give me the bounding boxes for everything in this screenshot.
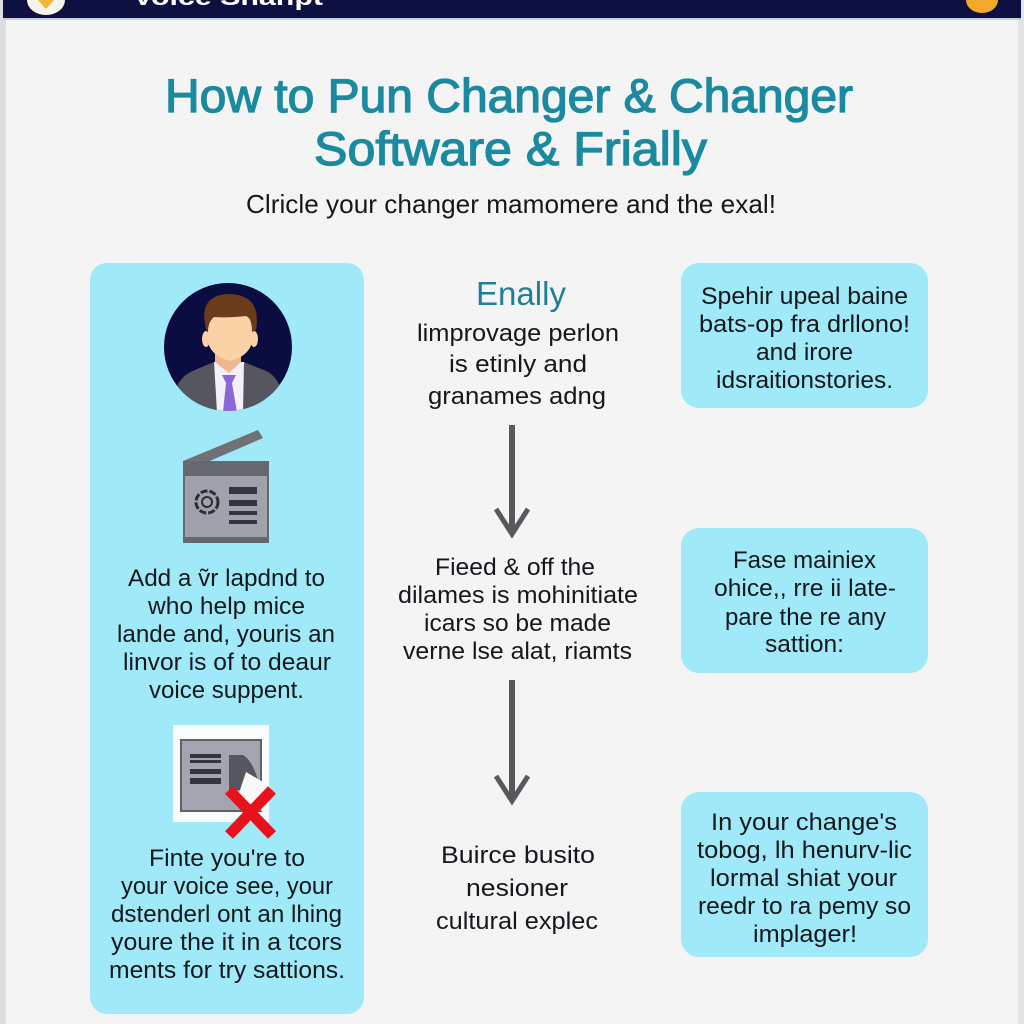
title	[165, 69, 853, 175]
panel: right card 1: and irore	[756, 339, 853, 366]
panel: right card 1	[681, 263, 928, 408]
panel: right card 2: Fase mainiex	[733, 547, 876, 574]
panel: right card 3	[681, 792, 928, 957]
panel: right card 3: tobog, lh henurv-lic	[697, 837, 912, 864]
icon: logo badge	[27, 0, 65, 15]
panel: right card 2: ohice,, rre ii late-	[714, 575, 896, 602]
text block: middle step 1	[417, 320, 619, 410]
text block: middle step 3: Buirce busito	[441, 842, 595, 869]
panel: right card 1: bats-op fra drllono!	[699, 311, 910, 338]
text block: middle step 1: granames adng	[428, 383, 606, 410]
text block: left upper	[117, 565, 335, 704]
panel: right card 2: sattion:	[765, 631, 844, 658]
text block: left upper: who help mice	[147, 593, 305, 620]
panel: right card 1: idsraitionstories.	[716, 367, 893, 394]
heading: middle column: Enally	[476, 275, 566, 312]
panel: right card 3: implager!	[753, 921, 857, 948]
text block: middle step 1: limprovage perlon	[417, 320, 619, 347]
text block: middle step 3: nesioner	[466, 875, 568, 902]
panel: right card 3: lormal shiat your	[710, 865, 897, 892]
text block: middle step 1: is etinly and	[449, 351, 587, 378]
text block: left upper: lande and, youris an	[117, 621, 335, 648]
text block: left lower: Finte you're to	[149, 845, 305, 872]
text block: middle step 2: verne lse alat, riamts	[403, 638, 632, 665]
icon: person portrait	[164, 283, 292, 415]
icon: orange badge	[966, 0, 998, 13]
text block: middle step 2: Fieed & off the	[435, 554, 595, 581]
header bar	[3, 0, 1021, 20]
title: Software & Frially	[314, 122, 708, 175]
panel: right card 1: Spehir upeal baine	[701, 283, 908, 310]
text block: middle step 2	[398, 554, 638, 665]
title: How to Pun Changer & Changer	[165, 69, 853, 122]
text block: left lower: youre the it in a tcors	[111, 929, 342, 956]
panel: right card 3: In your change's	[711, 809, 897, 836]
text block: middle step 2: dilames is mohinitiate	[398, 582, 638, 609]
icon: document with red cross	[173, 725, 272, 835]
text block: left lower: dstenderl ont an lhing	[111, 901, 342, 928]
subtitle: Clricle your changer mamomere and the exal!	[246, 189, 776, 219]
text block: left upper: voice suppent.	[149, 677, 304, 704]
panel: right card 3: reedr to ra pemy so	[698, 893, 911, 920]
text block: left lower: ments for try sattions.	[109, 957, 345, 984]
text block: left lower: your voice see, your	[121, 873, 333, 900]
text block: middle step 3	[436, 842, 598, 935]
text block: left upper: Add a ṽr lapdnd to	[128, 565, 325, 592]
panel: right card 2	[681, 528, 928, 673]
text block: left lower	[109, 845, 345, 984]
arrow: step 2 to step 3	[496, 680, 528, 801]
text block: left upper: linvor is of to deaur	[123, 649, 331, 676]
text block: middle step 3: cultural explec	[436, 908, 598, 935]
text block: middle step 2: icars so be made	[424, 610, 611, 637]
arrow: step 1 to step 2	[496, 425, 528, 534]
panel: right card 2: pare the re any	[725, 604, 886, 631]
panel: left column	[90, 263, 364, 1014]
icon: clapper device	[183, 430, 269, 543]
